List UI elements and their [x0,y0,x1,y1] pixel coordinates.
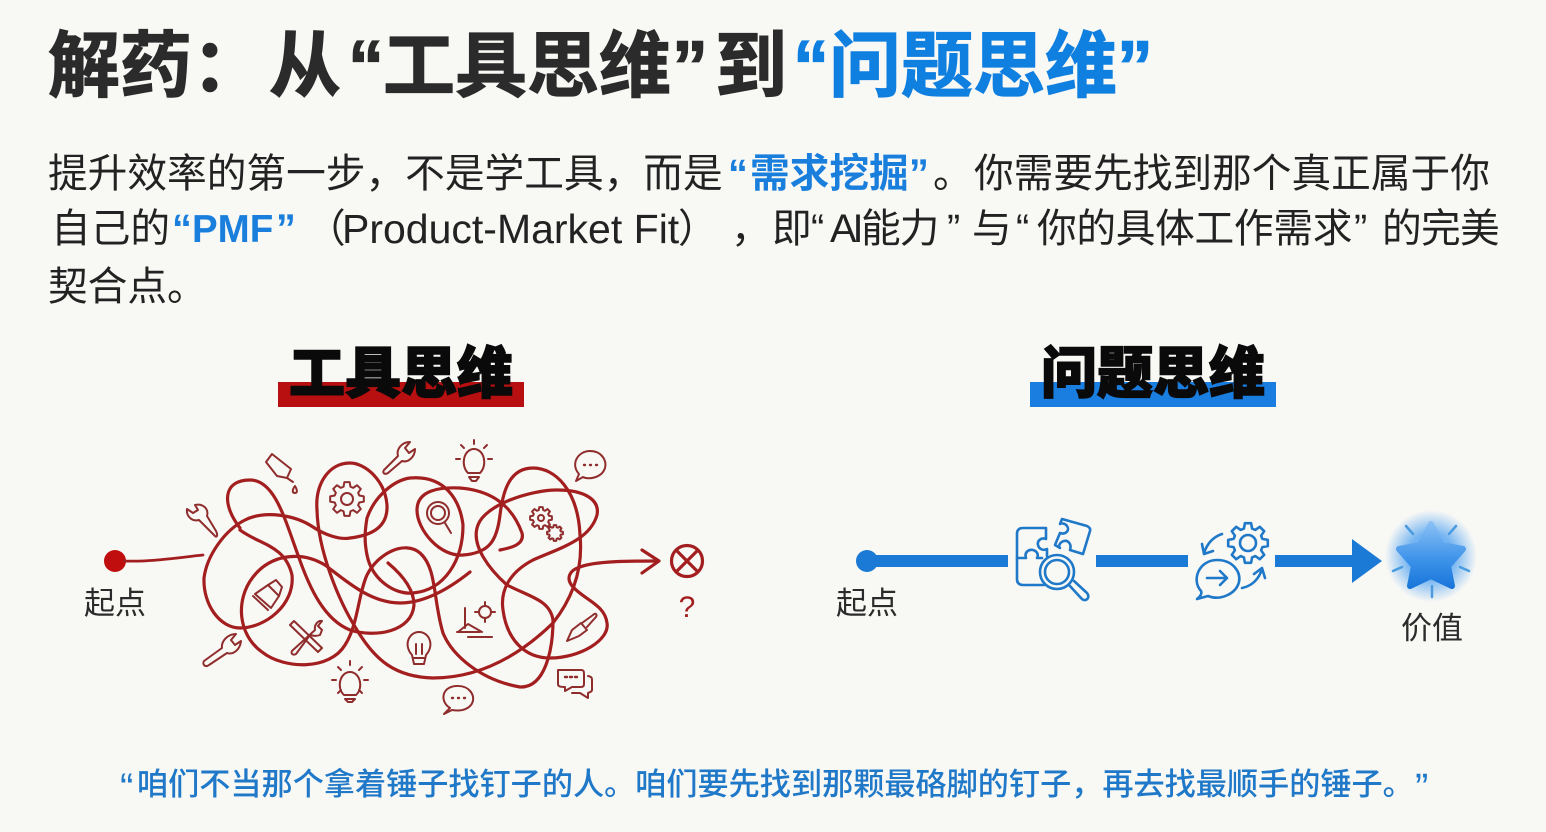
intro text block: 契合点。 [48,265,207,309]
icon: light bulb bottom left [332,661,368,702]
title: “ [793,27,829,107]
intro text block: “ [1016,207,1029,251]
icon: speech bubble bottom [443,686,473,714]
icon: chat bubbles [558,670,592,698]
problem thinking diagram [856,510,1477,602]
segment 1 [867,555,1008,567]
start dot [104,550,126,572]
intro text block: ） [678,207,718,251]
heading text: problem thinking: 问题思维 [1041,342,1265,405]
label: value: 价值 [1401,611,1463,646]
intro text block: 。 [933,152,973,196]
tangled path [204,463,658,687]
title: 到 [715,27,787,107]
failure mark: crossed circle [672,546,702,576]
question mark: ? [679,591,695,624]
tool thinking diagram [104,440,702,714]
title: 工具思维 [383,27,671,107]
icon: double gears [530,507,563,541]
start line [124,555,203,561]
intro text block: （ [306,207,346,251]
icon: light bulb top [456,440,492,481]
title: 从 [269,27,341,107]
icon: puzzle and magnifier [1017,519,1090,600]
intro text block: 需求挖掘 [750,152,909,196]
intro text block: ” [1354,207,1367,251]
icon: magnifier [427,502,451,533]
title [48,27,1153,107]
label: start right: 起点 [836,586,898,621]
bottom quote: “ [120,766,133,810]
icon: gear, chat and arrows [1197,523,1268,599]
icon: glowing star [1385,510,1477,602]
bottom quote: ” [1415,766,1428,810]
intro text block: 即 [772,207,812,251]
intro text block: ， [731,207,771,251]
intro text block: 提升效率的第一步，不是学工具，而是 [48,152,723,196]
title: 问题思维 [829,27,1117,107]
icon: glue bottle [266,454,297,493]
icon: speech bubble top right [575,451,605,481]
intro text block: “ [811,207,824,251]
icon: trowel [567,614,596,641]
intro text block: Product-Market Fit [342,206,679,252]
red highlight bar [278,382,524,407]
arrow head [642,550,659,573]
icon: machine and bulb [457,602,495,637]
icon: wrench left top [187,505,217,537]
blue highlight bar [1030,382,1276,407]
intro text block: “ [728,152,748,196]
heading: problem thinking [1030,342,1276,407]
intro text block: ” [909,152,929,196]
intro text block: 与 [972,207,1012,251]
intro text block: 你的具体工作需求 [1037,207,1352,251]
intro text block: “ [172,207,192,251]
intro text block [48,152,1499,309]
intro text block: 自己的 [51,207,170,251]
intro text block: ” [947,207,960,251]
intro text block: 能力 [861,207,938,251]
icon: gear [330,482,364,516]
intro text block: ” [276,207,296,251]
icon: lightbulb centre [408,632,430,664]
bottom quote: 咱们不当那个拿着锤子找钉子的人。咱们要先找到那颗最硌脚的钉子，再去找最顺手的锤子。 [137,767,1414,802]
label: start left: 起点 [84,586,146,621]
title: ” [672,27,708,107]
icon: paint tube [253,580,282,610]
title: “ [348,27,384,107]
intro text block: 的完美 [1382,207,1499,251]
icon: wrench bottom left [203,634,241,666]
intro text block: 你需要先找到那个真正属于你 [974,152,1490,196]
segment 3 with arrow [1275,539,1382,583]
icon: crossed tools [290,621,322,655]
icon: wrench top [383,442,415,474]
intro text block: AI [830,207,860,251]
heading: tool thinking [278,342,524,407]
segment 2 [1096,555,1188,567]
start dot [856,550,878,572]
title: 解药： [48,27,264,107]
intro text block: PMF [192,208,273,251]
title: ” [1117,27,1153,107]
heading text: tool thinking: 工具思维 [289,342,513,405]
